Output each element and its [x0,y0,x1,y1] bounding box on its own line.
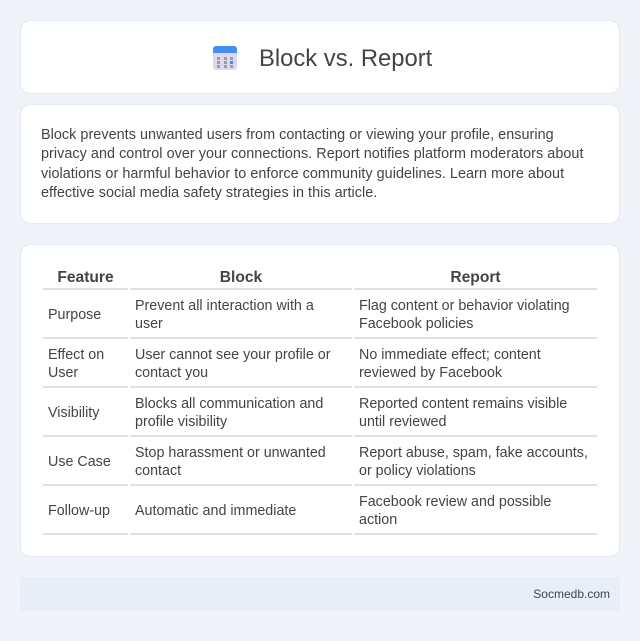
comparison table: No immediate effect; content [359,347,541,363]
comparison table: Report abuse, spam, fake accounts, [359,445,588,461]
intro text: violations or harmful behavior to enforce community guidelines. Learn more about [41,166,564,182]
footer credit: Socmedb.com [533,587,610,601]
row: Use Case: Use Case [48,454,111,470]
header: Report: Report [450,269,501,286]
comparison table: profile visibility [135,414,227,430]
comparison table: Stop harassment or unwanted [135,445,326,461]
table card [20,244,620,557]
intro text: Block prevents unwanted users from contacting or viewing your profile, ensuring [41,127,554,143]
header: Feature: Feature [57,269,114,286]
comparison table: until reviewed [359,414,446,430]
footer bar [20,577,620,611]
intro text: privacy and control over your connections. Report notifies platform moderators about [41,146,583,162]
comparison table: Blocks all communication and [135,396,323,412]
header: Block: Block [220,269,262,286]
row: Effect on User: User [48,365,78,381]
comparison table: action [359,512,397,528]
comparison table: User cannot see your profile or [135,347,330,363]
comparison table: Prevent all interaction with a [135,298,314,314]
row: Visibility: Visibility [48,405,99,421]
row: Effect on User [48,347,104,381]
comparison table: Reported content remains visible [359,396,567,412]
icon: calendar [213,46,237,70]
comparison table: Facebook review and possible [359,494,551,510]
comparison table: contact you [135,365,208,381]
intro text: effective social media safety strategies in this article. [41,185,377,201]
row: Follow-up: Follow-up [48,503,110,519]
row: Effect on User: Effect on [48,347,104,363]
title: Block vs. Report [259,45,432,72]
comparison table: Flag content or behavior violating [359,298,570,314]
comparison table: or policy violations [359,463,476,479]
comparison table: Automatic and immediate [135,503,296,519]
intro text [41,127,584,201]
title card [20,20,620,94]
comparison table: Facebook policies [359,316,473,332]
row: Purpose: Purpose [48,307,101,323]
comparison table: user [135,316,163,332]
comparison table: contact [135,463,181,479]
comparison table: reviewed by Facebook [359,365,502,381]
intro card [20,104,620,224]
